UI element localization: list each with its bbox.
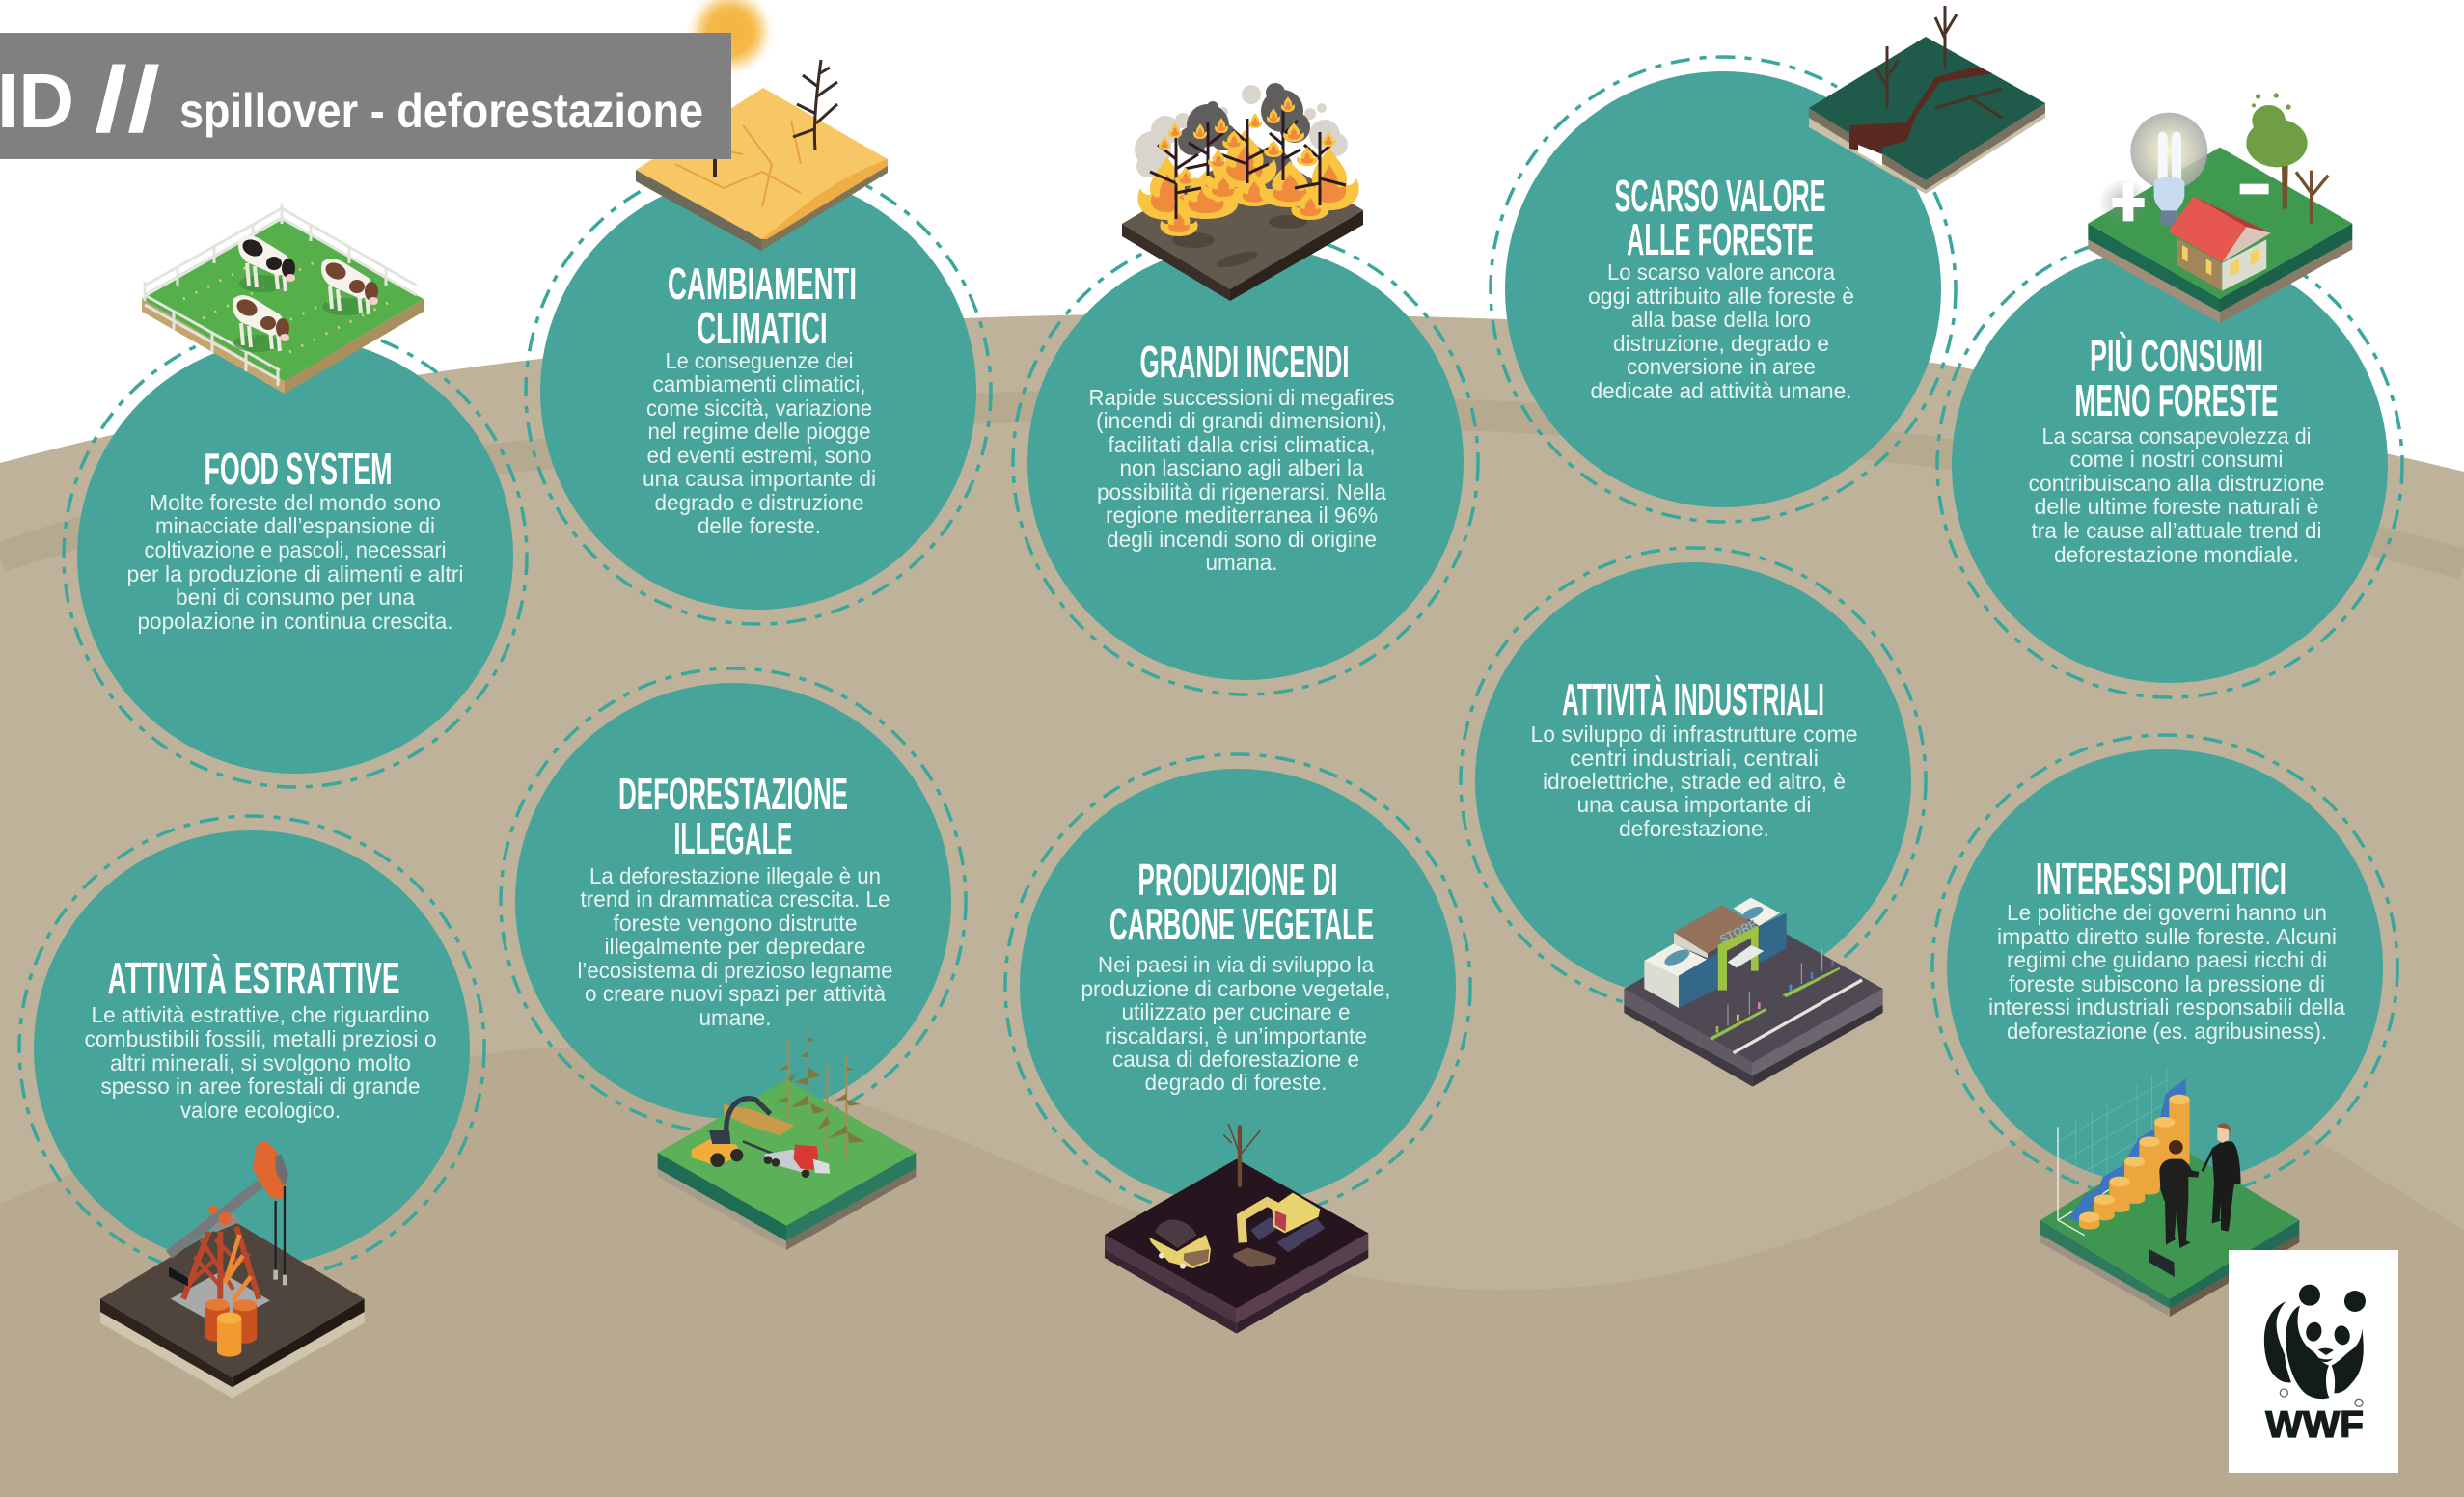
text: produzione di carbone vegetale <box>1081 952 1391 1095</box>
icon: coin chart and businessmen <box>2040 1068 2299 1317</box>
text: più consumi meno foreste: tra le cause all’attuale trend di <box>2032 518 2321 543</box>
text: attività estrattive: Le attività estrattive, che riguardino <box>91 1002 430 1027</box>
text: produzione di carbone vegetale: riscaldarsi, è un’importante <box>1105 1023 1367 1048</box>
text: interessi politici: impatto diretto sulle foreste. Alcuni <box>1997 924 2337 949</box>
text: attività industriali: una causa importante di <box>1576 792 1812 817</box>
text: grandi incendi: regione mediterranea il 96% <box>1106 503 1378 528</box>
hill landscape <box>0 313 2464 1497</box>
heading: più consumi meno foreste: MENO FORESTE <box>2074 375 2279 425</box>
text: più consumi meno foreste <box>2028 423 2325 567</box>
text: deforestazione illegale: umane. <box>698 1005 772 1030</box>
text: interessi politici: deforestazione (es. agribusiness). <box>2007 1019 2327 1044</box>
panel: più consumi meno foreste <box>1937 93 2402 697</box>
title banner <box>0 33 731 159</box>
text: deforestazione illegale: La deforestazione illegale è un <box>589 863 881 888</box>
heading: grandi incendi: GRANDI INCENDI <box>1140 337 1349 387</box>
panel: produzione di carbone vegetale <box>1005 754 1470 1334</box>
text: grandi incendi: Rapide successioni di megafires <box>1088 385 1395 410</box>
heading: cambiamenti climatici: CAMBIAMENTI <box>668 259 857 309</box>
text: produzione di carbone vegetale: produzione di carbone vegetale, <box>1081 976 1391 1001</box>
text: food system: popolazione in continua crescita. <box>137 609 453 634</box>
icon: store and road: STORE <box>1717 916 1759 946</box>
text: grandi incendi: umana. <box>1206 550 1277 575</box>
heading: attività industriali: ATTIVITÀ INDUSTRIALI <box>1562 674 1824 724</box>
text: attività industriali <box>1530 721 1858 841</box>
text: food system: coltivazione e pascoli, necessari <box>145 537 446 562</box>
text: interessi politici: regimi che guidano paesi ricchi di <box>2007 947 2327 972</box>
heading: deforestazione illegale: DEFORESTAZIONE <box>618 769 848 819</box>
text: attività estrattive <box>85 1002 436 1123</box>
panel: attività estrattive <box>19 816 484 1398</box>
icon: cows in a fenced pasture <box>142 204 424 394</box>
icon: oil pump and barrels <box>100 1141 365 1398</box>
text: cambiamenti climatici: una causa importante di <box>643 466 876 491</box>
text: cambiamenti climatici: come siccità, variazione <box>646 395 872 421</box>
text: cambiamenti climatici <box>643 348 876 538</box>
heading: produzione di carbone vegetale <box>1109 855 1374 949</box>
text: food system: Molte foreste del mondo sono <box>150 490 441 515</box>
text: deforestazione illegale: o creare nuovi spazi per attività <box>585 981 886 1006</box>
icon: split forest ground <box>1809 6 2045 194</box>
text: deforestazione illegale: trend in drammatica crescita. Le <box>581 886 890 912</box>
icon: forest fire <box>1122 83 1363 301</box>
text: cambiamenti climatici: Le conseguenze dei <box>666 348 853 373</box>
text: deforestazione illegale: illegalmente per depredare <box>604 934 866 959</box>
text: grandi incendi: degli incendi sono di origine <box>1107 527 1377 552</box>
panel: cambiamenti climatici <box>526 0 991 624</box>
heading: scarso valore alle foreste <box>1615 171 1825 264</box>
icon: coal truck and excavator <box>1105 1124 1368 1334</box>
logo: WWF panda: WWF <box>2265 1403 2364 1446</box>
text: deforestazione illegale <box>577 863 893 1030</box>
logo: WWF panda <box>2229 1250 2398 1473</box>
text: attività estrattive: altri minerali, si svolgono molto <box>110 1050 411 1075</box>
text: cambiamenti climatici: delle foreste. <box>698 513 821 538</box>
text: produzione di carbone vegetale: causa di deforestazione e <box>1112 1047 1359 1072</box>
subtitle: spillover - deforestazione <box>179 84 703 138</box>
text: scarso valore alle foreste: alla base della loro <box>1631 307 1811 332</box>
heading: produzione di carbone vegetale: PRODUZIONE DI <box>1138 855 1337 905</box>
panel: deforestazione illegale <box>501 668 966 1250</box>
panel: scarso valore alle foreste <box>1491 6 2045 522</box>
panel: attività industriali <box>1461 548 1926 1087</box>
text: attività estrattive: spesso in aree forestali di grande <box>100 1074 421 1099</box>
heading: attività estrattive: ATTIVITÀ ESTRATTIVE <box>108 953 399 1003</box>
text: scarso valore alle foreste: Lo scarso valore ancora <box>1607 259 1835 285</box>
heading: deforestazione illegale: ILLEGALE <box>673 813 793 863</box>
text: più consumi meno foreste: come i nostri consumi <box>2070 447 2283 472</box>
text: interessi politici: foreste subiscono la pressione di <box>2009 971 2325 996</box>
text: più consumi meno foreste: deforestazione mondiale. <box>2054 542 2299 567</box>
text: attività industriali: idroelettriche, strade ed altro, è <box>1543 769 1846 794</box>
text: cambiamenti climatici: ed eventi estremi, sono <box>646 443 872 468</box>
heading: cambiamenti climatici <box>668 259 857 353</box>
icon: sun over drought land <box>636 0 888 251</box>
text: produzione di carbone vegetale: Nei paesi in via di sviluppo la <box>1098 952 1374 977</box>
panel: food system <box>64 204 527 787</box>
text: produzione di carbone vegetale: degrado di foreste. <box>1144 1070 1328 1095</box>
text: interessi politici <box>1988 900 2345 1044</box>
text: interessi politici: Le politiche dei governi hanno un <box>2007 900 2327 925</box>
text: produzione di carbone vegetale: utilizzato per cucinare e <box>1121 999 1351 1024</box>
title: slashes: // <box>95 48 160 151</box>
text: grandi incendi: non lasciano agli alberi la <box>1119 455 1364 480</box>
text: cambiamenti climatici: nel regime delle piogge <box>648 419 870 444</box>
heading: deforestazione illegale <box>618 769 848 863</box>
text: attività industriali: deforestazione. <box>1619 816 1769 841</box>
text: grandi incendi: (incendi di grandi dimensioni), <box>1096 408 1387 433</box>
heading: cambiamenti climatici: CLIMATICI <box>697 303 828 353</box>
text: attività industriali: Lo sviluppo di infrastrutture come <box>1530 721 1858 747</box>
heading: più consumi meno foreste <box>2074 331 2279 425</box>
heading: interessi politici: INTERESSI POLITICI <box>2036 854 2286 904</box>
heading: scarso valore alle foreste: SCARSO VALORE <box>1615 171 1825 221</box>
icon: logging machinery <box>658 1025 916 1250</box>
icon: house, bulb and tree <box>2088 93 2352 323</box>
text: deforestazione illegale: l’ecosistema di prezioso legname <box>577 958 893 983</box>
text: scarso valore alle foreste: dedicate ad attività umane. <box>1590 378 1852 403</box>
text: food system: beni di consumo per una <box>176 585 415 610</box>
icon: store and road <box>1624 898 1883 1087</box>
heading: più consumi meno foreste: PIÙ CONSUMI <box>2090 331 2263 381</box>
text: grandi incendi <box>1088 385 1395 575</box>
text: food system <box>127 490 463 634</box>
panel: grandi incendi <box>1013 83 1478 694</box>
panel: interessi politici <box>1932 735 2397 1317</box>
text: grandi incendi: facilitati dalla crisi climatica, <box>1108 432 1376 457</box>
text: cambiamenti climatici: degrado e distruzione <box>654 490 864 515</box>
text: più consumi meno foreste: delle ultime foreste naturali è <box>2034 494 2319 519</box>
text: deforestazione illegale: foreste vengono distrutte <box>614 911 857 936</box>
text: cambiamenti climatici: cambiamenti climatici, <box>652 371 866 396</box>
text: food system: minacciate dall’espansione di <box>155 513 435 538</box>
text: scarso valore alle foreste: conversione in aree <box>1627 354 1816 379</box>
text: interessi politici: interessi industriali responsabili della <box>1988 994 2345 1020</box>
heading: produzione di carbone vegetale: CARBONE VEGETALE <box>1109 899 1374 949</box>
text: scarso valore alle foreste <box>1588 259 1854 403</box>
text: scarso valore alle foreste: oggi attribuito alle foreste è <box>1588 284 1854 309</box>
heading: food system: FOOD SYSTEM <box>205 444 392 494</box>
text: scarso valore alle foreste: distruzione, degrado e <box>1613 331 1829 356</box>
text: più consumi meno foreste: contribuiscano alla distruzione <box>2028 471 2325 496</box>
text: attività estrattive: combustibili fossili, metalli preziosi o <box>85 1026 436 1051</box>
text: food system: per la produzione di alimenti e altri <box>127 561 463 586</box>
heading: scarso valore alle foreste: ALLE FORESTE <box>1627 214 1814 264</box>
text: attività estrattive: valore ecologico. <box>180 1098 341 1123</box>
text: più consumi meno foreste: La scarsa consapevolezza di <box>2041 423 2312 449</box>
text: attività industriali: centri industriali, centrali <box>1570 746 1819 771</box>
text: grandi incendi: possibilità di rigenerarsi. Nella <box>1097 479 1386 504</box>
